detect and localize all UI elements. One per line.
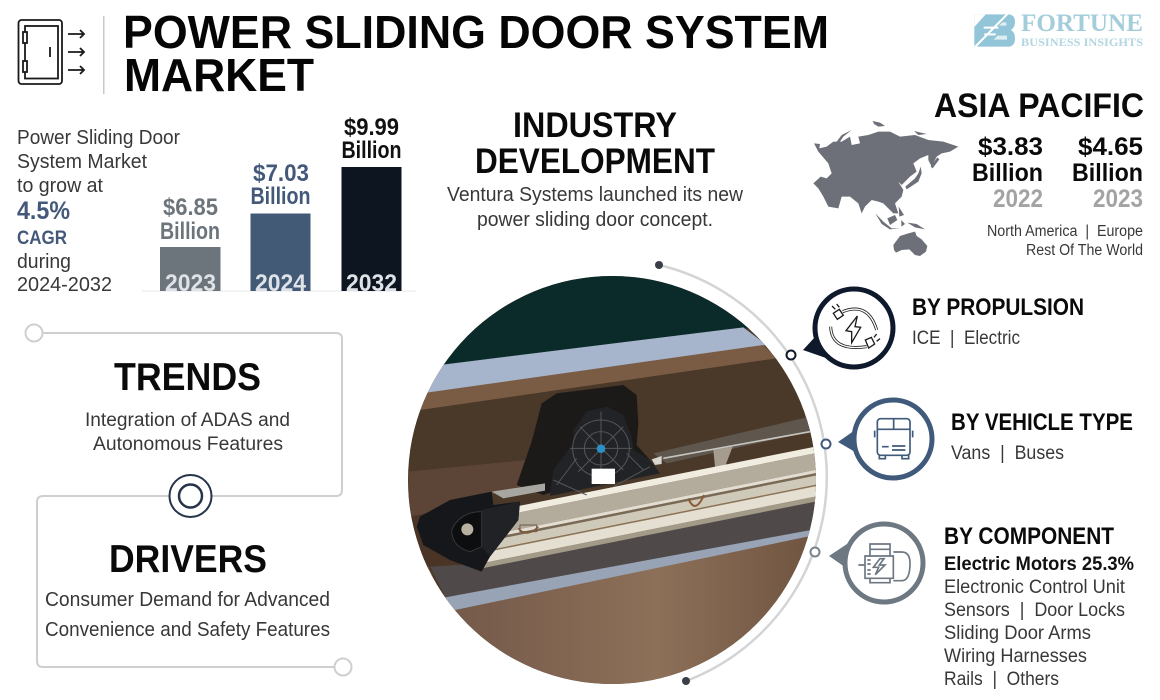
- segment: by component: BY COMPONENT: [944, 523, 1114, 550]
- drivers text: [45, 538, 330, 641]
- segment: by component: Rails | Others: [944, 669, 1059, 690]
- gear housing: [550, 407, 660, 496]
- segment: by component: Electronic Control Unit: [944, 577, 1126, 598]
- bar 2032: $9.99: [344, 114, 399, 141]
- bar 2023: [160, 194, 220, 297]
- bar 2024: [250, 160, 310, 297]
- bar 2032: Billion: [342, 137, 402, 164]
- icon: bus: [838, 400, 932, 478]
- rail end cap: [417, 492, 520, 572]
- regional stats: [934, 87, 1144, 259]
- segment: by vehicle type: BY VEHICLE TYPE: [951, 409, 1133, 436]
- trends text: TRENDS: [114, 356, 261, 399]
- text block: CAGR summary: System Market: [17, 151, 147, 173]
- regional stats: Rest Of The World: [1026, 242, 1143, 259]
- title: MARKET: [124, 49, 314, 101]
- slider rod: [492, 483, 545, 498]
- drivers text: DRIVERS: [109, 538, 267, 581]
- segment: by component: Sliding Door Arms: [944, 623, 1091, 644]
- regional stats: $3.83: [978, 133, 1043, 161]
- rail: [519, 447, 814, 512]
- segment: by component: Sensors | Door Locks: [944, 600, 1125, 621]
- industry development: DEVELOPMENT: [475, 142, 715, 181]
- regional stats: ASIA PACIFIC: [934, 87, 1144, 125]
- segment: by propulsion: ICE | Electric: [912, 328, 1020, 349]
- title: POWER SLIDING DOOR SYSTEM: [123, 6, 829, 58]
- bar 2023: Billion: [160, 218, 220, 245]
- text block: CAGR summary: [17, 127, 180, 296]
- bar 2023: 2023: [165, 270, 216, 297]
- rivets: [518, 527, 538, 533]
- regional stats: 2022: [993, 185, 1043, 213]
- text block: CAGR summary: CAGR: [17, 228, 67, 249]
- icon: sliding door: [18, 20, 84, 84]
- trends text: Autonomous Features: [93, 434, 283, 455]
- arc around photo: [655, 261, 827, 685]
- text block: CAGR summary: 4.5%: [17, 197, 70, 225]
- regional stats: Billion: [1072, 159, 1143, 187]
- logo: Fortune Business Insights: [974, 10, 1143, 49]
- segment: by vehicle type: Vans | Buses: [951, 443, 1064, 464]
- text block: CAGR summary: to grow at: [17, 175, 103, 197]
- drivers text: Consumer Demand for Advanced: [45, 589, 330, 611]
- bar 2024: $7.03: [253, 160, 309, 187]
- connector target: [170, 475, 212, 517]
- segment: by component: Wiring Harnesses: [944, 646, 1087, 667]
- trends text: Integration of ADAS and: [85, 410, 290, 431]
- logo: Fortune Business Insights: FORTUNE: [1021, 10, 1143, 37]
- text block: CAGR summary: Power Sliding Door: [17, 127, 180, 149]
- icon: electric plug cycle: [803, 289, 893, 367]
- industry development: [447, 106, 744, 231]
- drivers text: Convenience and Safety Features: [45, 619, 330, 641]
- logo: Fortune Business Insights: BUSINESS INSIGHTS: [1021, 35, 1143, 49]
- icon: electric motor: [829, 524, 923, 602]
- bar 2024: Billion: [250, 183, 310, 210]
- industry development: Ventura Systems launched its new: [447, 184, 744, 206]
- bar 2023: $6.85: [163, 194, 218, 221]
- bracket: [517, 385, 650, 495]
- trends text: [85, 356, 290, 455]
- regional stats: Billion: [972, 159, 1043, 187]
- segment: by component: Electric Motors 25.3%: [944, 554, 1134, 575]
- title: [123, 6, 829, 101]
- regional stats: 2023: [1093, 185, 1143, 213]
- industry development: INDUSTRY: [513, 106, 677, 145]
- title divider: [103, 16, 104, 94]
- regional stats: $4.65: [1078, 133, 1143, 161]
- map: Asia Pacific: [813, 121, 958, 256]
- segment: by propulsion: [786, 289, 1084, 367]
- segment: by component: [810, 523, 1134, 690]
- bar 2032: [342, 114, 402, 297]
- industry development: power sliding door concept.: [477, 209, 713, 231]
- text block: CAGR summary: 2024-2032: [17, 274, 112, 296]
- photo: power sliding door mechanism: [400, 270, 833, 690]
- bar chart: market size: [142, 114, 416, 297]
- segment: by vehicle type: [822, 400, 1133, 478]
- segment: by propulsion: BY PROPULSION: [912, 294, 1084, 321]
- text block: CAGR summary: during: [17, 251, 71, 273]
- bar 2024: 2024: [255, 270, 307, 297]
- panel: trends and drivers connector: [26, 324, 352, 676]
- regional stats: North America | Europe: [987, 223, 1143, 240]
- bar 2032: 2032: [346, 270, 397, 297]
